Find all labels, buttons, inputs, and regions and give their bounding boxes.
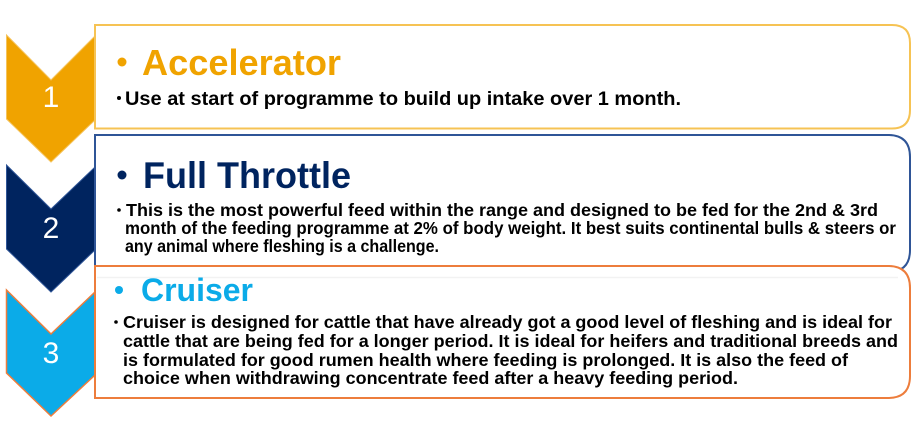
panel: Cruiser [95,266,910,398]
chevron 1 [6,35,95,162]
text: Cruiser description [114,312,898,388]
text: Full Throttle description [117,200,896,256]
text: Full Throttle description: any animal where fleshing is a challenge. [125,236,439,256]
text: Cruiser description: is formulated for good rumen health where feeding is prolonged. It is also the feed of [123,350,848,370]
heading: Cruiser: Cruiser [141,272,253,308]
heading: Full Throttle: Full Throttle [143,155,351,196]
chevron 3: 3 [43,337,59,370]
text: Accelerator description: Use at start of programme to build up intake over 1 month. [125,89,681,110]
text: Cruiser description: cattle that are being fed for a longer period. It is ideal for heifers and traditional breeds and [123,331,898,351]
text: Cruiser description: Cruiser is designed for cattle that have already got a good level of fleshing and is ideal for [123,312,892,332]
chevron 2 [6,165,95,292]
panel: Accelerator [95,25,910,128]
text: Full Throttle description: This is the most powerful feed within the range and designed to be fed for the 2nd & 3rd [126,200,878,220]
text: Cruiser description: choice when withdrawing concentrate feed after a heavy feeding period. [123,368,738,388]
heading: Accelerator: Accelerator [142,42,341,83]
chevron 3 [6,290,95,416]
panel: Full Throttle [95,135,910,272]
text: Full Throttle description: month of the feeding programme at 2% of body weight. It best suits continental bulls & steers or [125,218,896,238]
chevron 2: 2 [43,212,59,245]
chevron 1: 1 [43,81,59,114]
